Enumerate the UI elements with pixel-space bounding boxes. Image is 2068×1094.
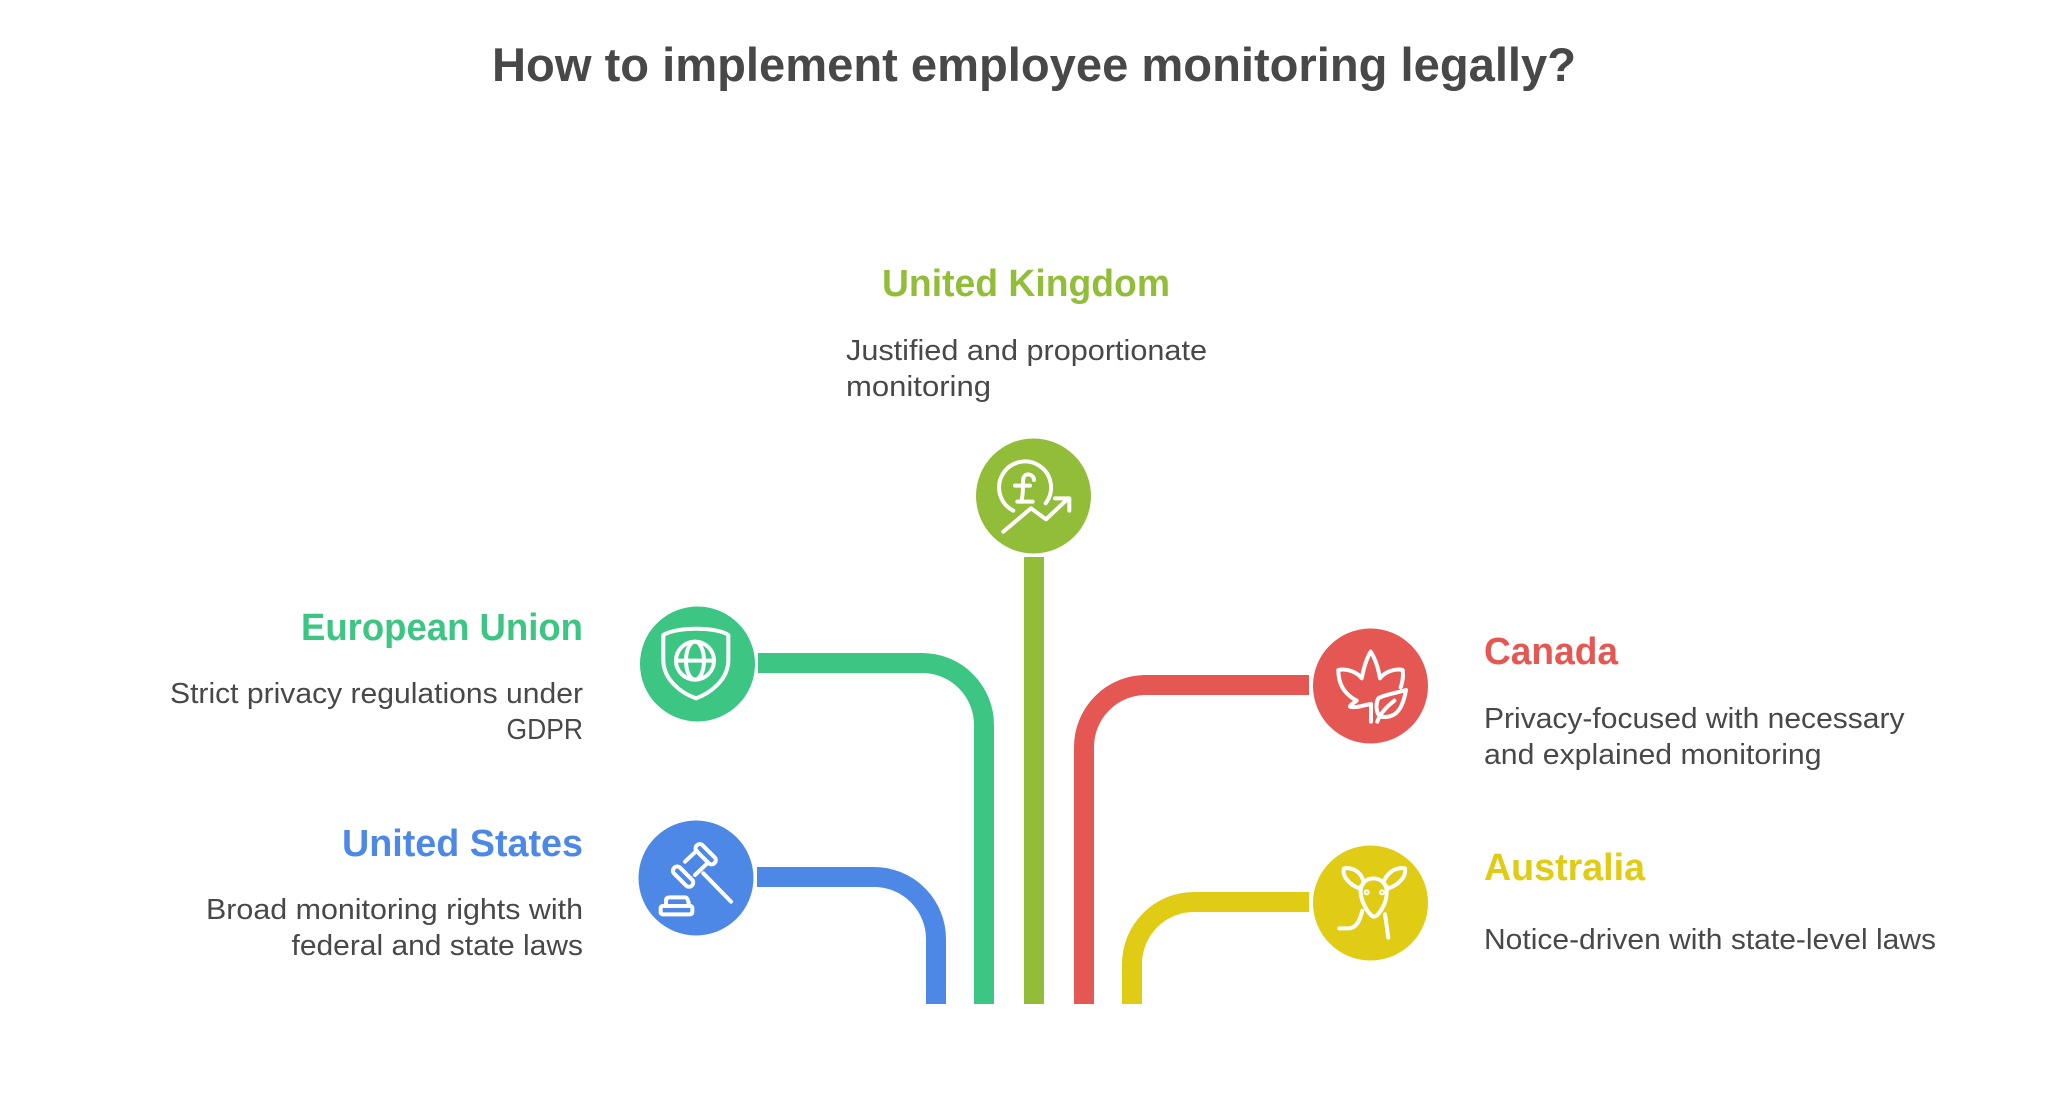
heading: European Union: European Union: [301, 607, 583, 649]
title: How to implement employee monitoring legally?: [492, 38, 1576, 91]
icon circle: Canada maple leaf: [1313, 628, 1428, 744]
description: United States: [206, 894, 583, 962]
description: Australia: Notice-driven with state-level laws: [1484, 924, 1936, 956]
description: European Union: [170, 678, 583, 746]
connector: United Kingdom: [1024, 557, 1044, 1004]
panel: United Kingdom: [846, 263, 1207, 1004]
connector: United States: [757, 877, 936, 1004]
connector: Canada: [1084, 685, 1309, 1004]
heading: United Kingdom: United Kingdom: [882, 263, 1170, 305]
panel: Canada: [1084, 628, 1905, 1004]
icon: kangaroo: [1339, 868, 1405, 938]
icon: gavel: [661, 842, 731, 914]
heading: Canada: Canada: [1484, 631, 1619, 673]
panel: European Union: [170, 606, 984, 1004]
description: Canada: [1484, 703, 1905, 771]
description: United States: federal and state laws: [292, 930, 583, 962]
icon circle: United Kingdom pound: [976, 438, 1091, 554]
description: European Union: GDPR: [506, 714, 583, 746]
icon circle: European Union shield: [640, 606, 755, 722]
description: United Kingdom: [846, 335, 1207, 403]
description: Canada: Privacy-focused with necessary: [1484, 703, 1905, 735]
icon circle: United States gavel: [638, 820, 754, 936]
description: United States: Broad monitoring rights with: [206, 894, 583, 926]
icon: shield with globe: [663, 629, 728, 698]
description: European Union: Strict privacy regulations under: [170, 678, 583, 710]
description: Canada: and explained monitoring: [1484, 739, 1822, 771]
connector: Australia: [1132, 902, 1309, 1004]
panel: United States: [206, 820, 936, 1004]
heading: Australia: Australia: [1484, 847, 1646, 889]
description: United Kingdom: Justified and proportionate: [846, 335, 1207, 367]
icon: maple leaf: [1338, 652, 1406, 722]
panel: Australia: [1132, 846, 1936, 1004]
connector: European Union: [758, 663, 984, 1004]
description: United Kingdom: monitoring: [846, 371, 991, 403]
icon circle: Australia kangaroo: [1313, 846, 1428, 960]
icon: pound with rising arrow: [999, 461, 1069, 532]
heading: United States: United States: [342, 823, 583, 865]
